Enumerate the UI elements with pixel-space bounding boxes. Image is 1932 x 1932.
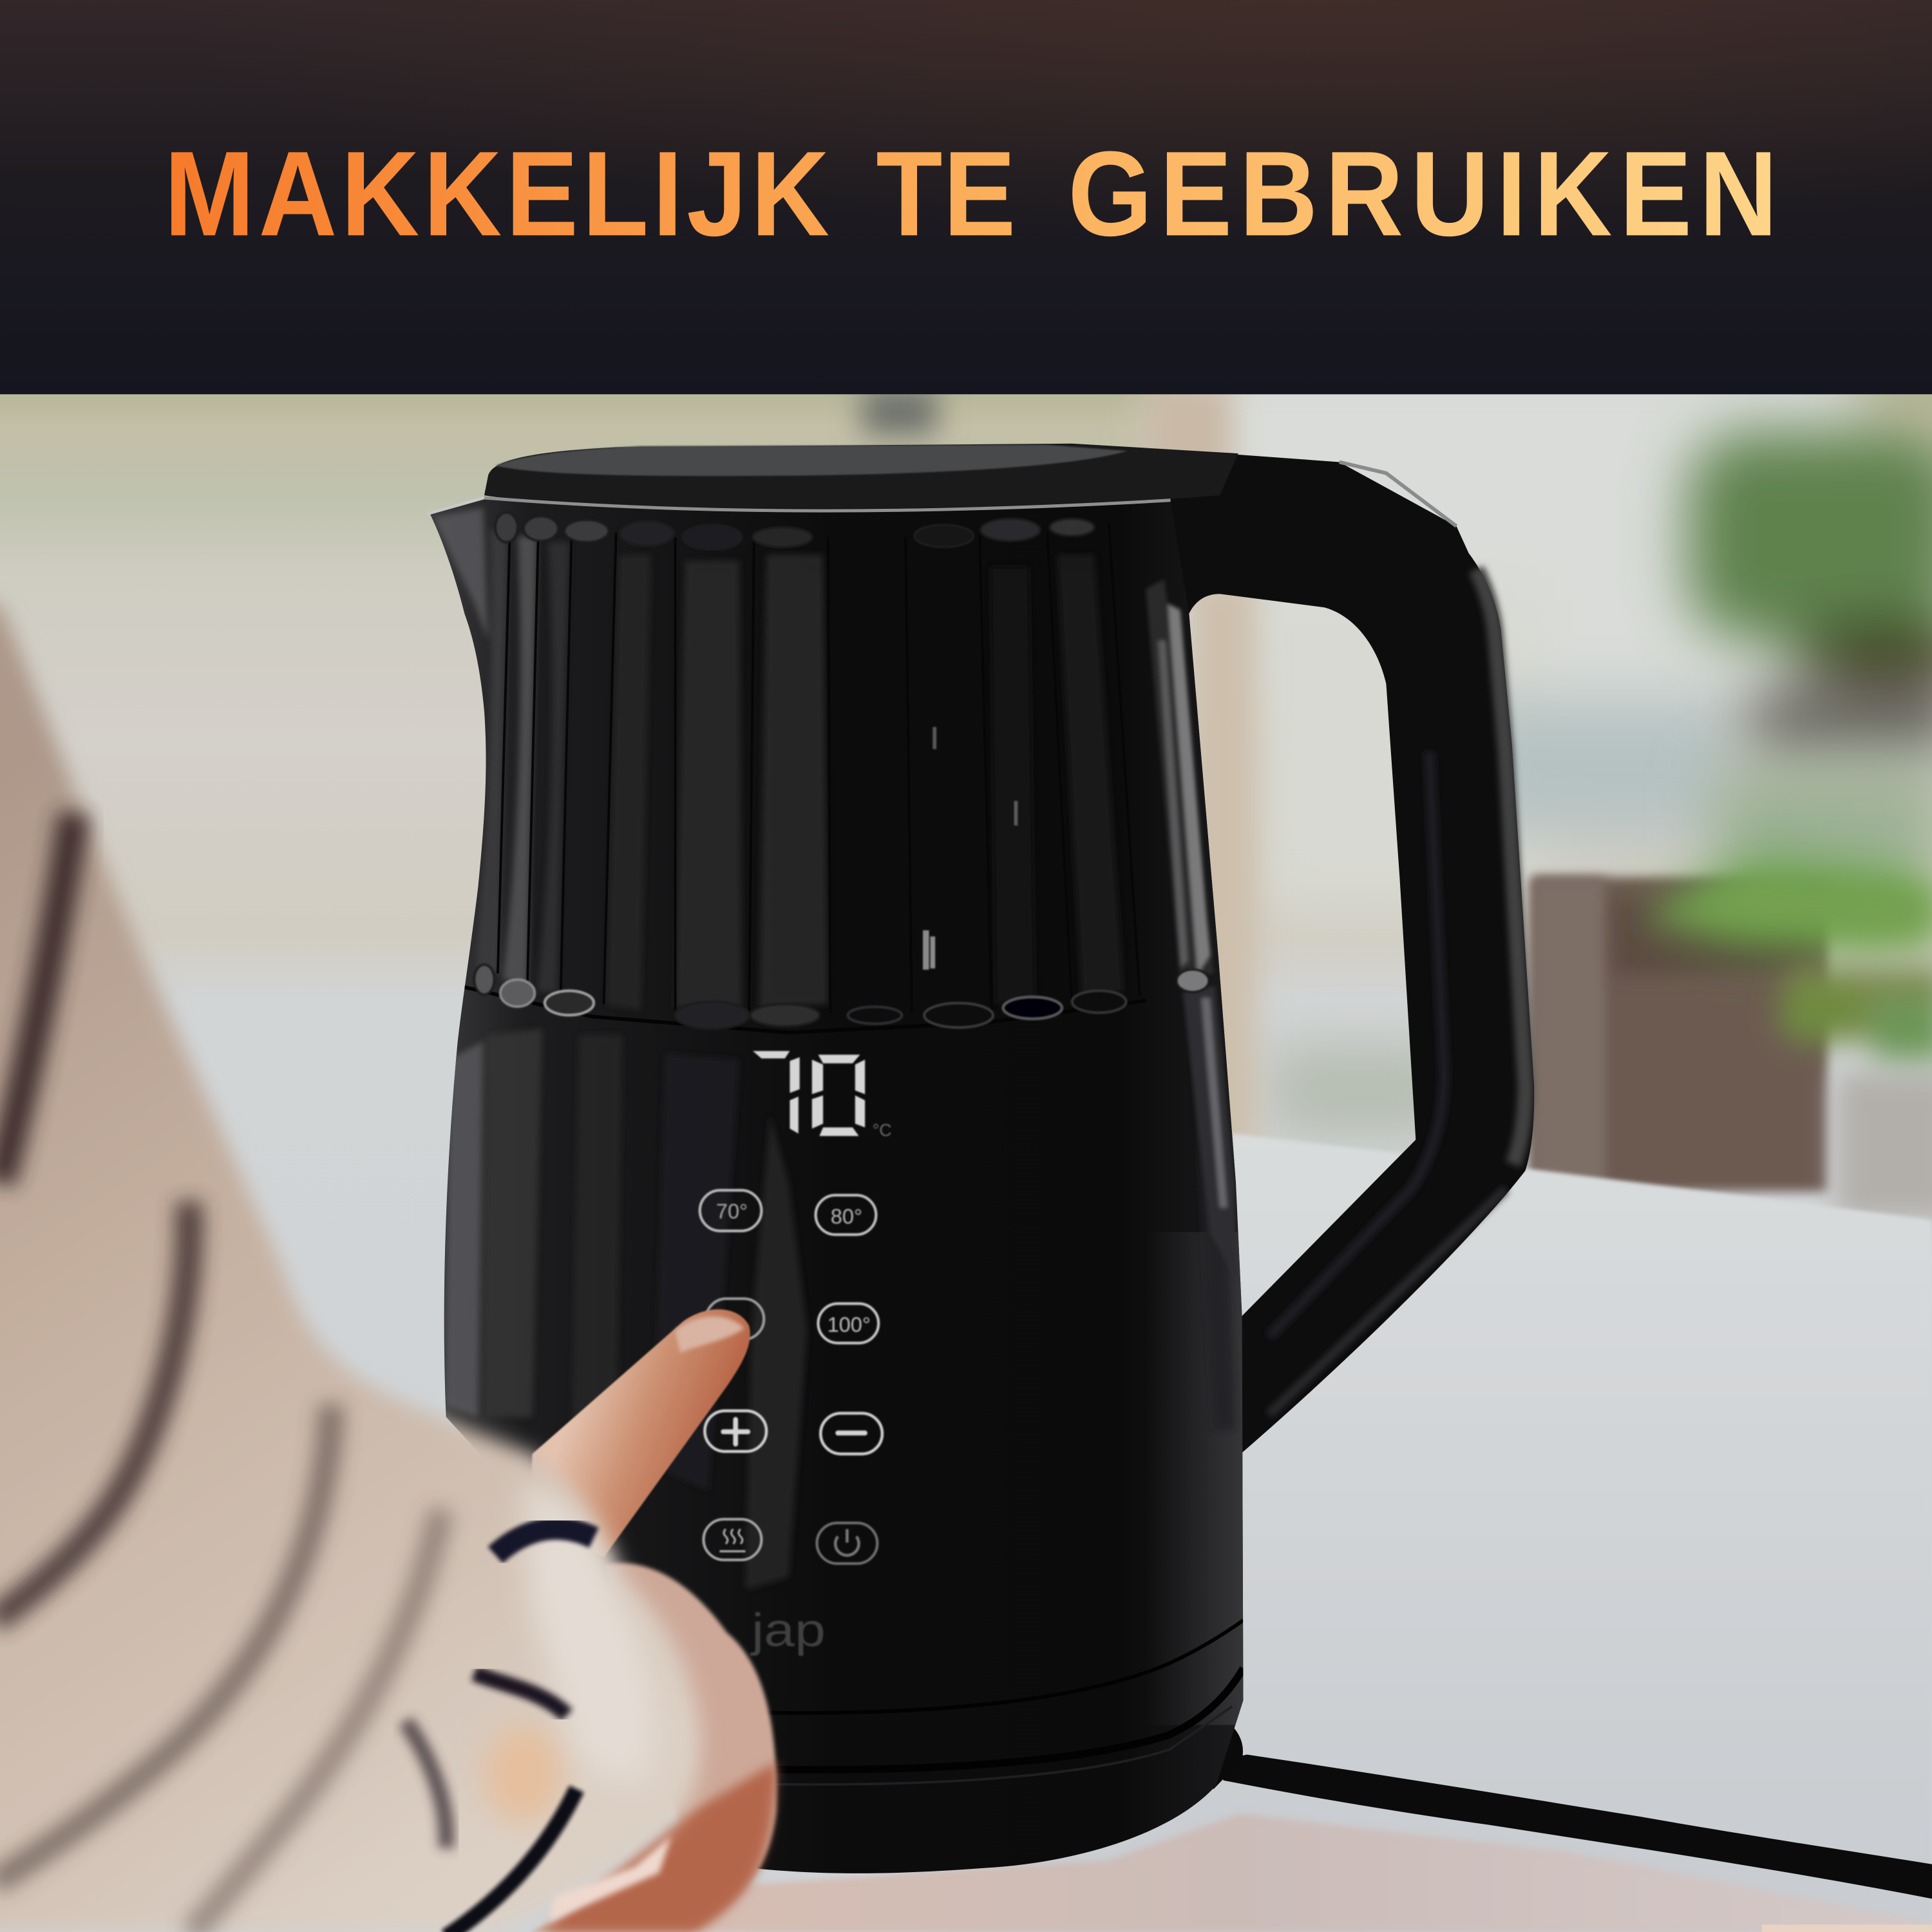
- potted plant container: [1531, 877, 1932, 1220]
- button plus: [705, 1411, 766, 1452]
- index finger: [530, 1309, 750, 1557]
- table front edge: [690, 1814, 1932, 1932]
- side fin beside the handle: [1146, 579, 1237, 1282]
- table surface: [1233, 1132, 1932, 1243]
- lid top surface: [495, 445, 1128, 476]
- base ring: [764, 1620, 1243, 1713]
- title: GEBRUIKEN: [1068, 126, 1777, 261]
- digital display: 70: [753, 1051, 865, 1136]
- button power: [817, 1523, 877, 1564]
- steel rim line: [484, 498, 1171, 511]
- thumb and palm skin: [530, 1563, 777, 1932]
- sweater dark stripes: [0, 813, 594, 1932]
- button keep warm: [703, 1519, 761, 1560]
- blurred plants: [1651, 431, 1932, 949]
- degree C symbol: °C: [873, 1121, 892, 1140]
- glints: [923, 727, 1018, 970]
- title: TE: [876, 126, 1016, 261]
- button 80: [816, 1195, 876, 1235]
- sweater sleeve: [0, 604, 701, 1932]
- button minus: [820, 1414, 882, 1454]
- handle: [1146, 455, 1534, 1461]
- rib reflections: [433, 507, 1244, 1785]
- header band: [0, 0, 1932, 394]
- control panel: [700, 1051, 892, 1656]
- rib separator lines: [498, 524, 1140, 1013]
- button 80: 80°: [831, 1205, 862, 1228]
- power cord: [1146, 1720, 1932, 1899]
- button 70: [700, 1190, 761, 1231]
- fingernail: [675, 1316, 744, 1353]
- title: MAKKELIJK: [164, 126, 829, 261]
- button 100: [818, 1303, 878, 1343]
- sweater light areas: [484, 1479, 654, 1824]
- handle highlights: [1269, 462, 1526, 1414]
- nail highlight: [548, 1836, 672, 1922]
- button 70: 70°: [716, 1200, 748, 1223]
- lid: [484, 444, 1238, 509]
- kettle body: [430, 498, 1243, 1873]
- kettle: [428, 444, 1534, 1873]
- spout edge: [428, 498, 484, 514]
- lower palm: [542, 1762, 776, 1932]
- corner patch: [1762, 1925, 1932, 1932]
- button 90: [706, 1299, 764, 1340]
- hand and sweater arm: [0, 604, 777, 1932]
- rib tops and bottoms: [475, 513, 1209, 1029]
- step between fluted and lower body: [459, 986, 1146, 1032]
- button 100: 100°: [828, 1313, 871, 1336]
- brand logo: jap: [750, 1604, 826, 1656]
